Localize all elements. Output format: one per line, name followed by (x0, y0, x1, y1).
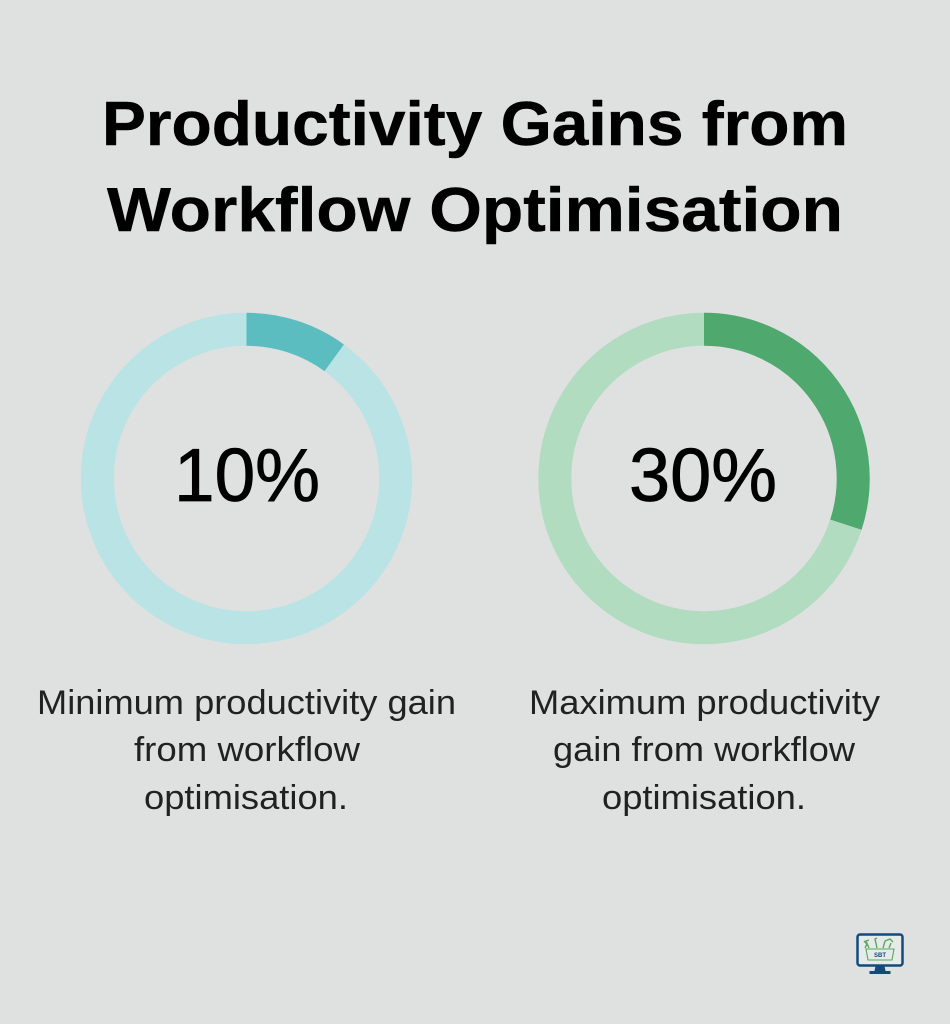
description: minimum: Minimum productivity gain (37, 684, 456, 722)
value: 30%: 30% (629, 433, 777, 517)
icon: logo monitor with toolbox (858, 934, 902, 974)
value: 10%: 10% (174, 433, 320, 517)
description: minimum: optimisation. (144, 779, 348, 817)
donut chart: 30% (555, 329, 853, 628)
title: Productivity Gains from (102, 90, 848, 159)
panel: minimum gain (37, 329, 456, 817)
description: maximum: Maximum productivity (529, 684, 880, 722)
panel: maximum gain (529, 329, 880, 817)
description: minimum (37, 684, 456, 817)
title: Workflow Optimisation (107, 176, 843, 245)
description: minimum: from workflow (134, 731, 360, 769)
description: maximum (529, 684, 880, 817)
title (102, 90, 848, 245)
donut chart: 10% (97, 329, 396, 628)
icon: logo monitor with toolbox: SBT (874, 953, 886, 959)
description: maximum: optimisation. (602, 779, 806, 817)
description: maximum: gain from workflow (553, 731, 855, 769)
